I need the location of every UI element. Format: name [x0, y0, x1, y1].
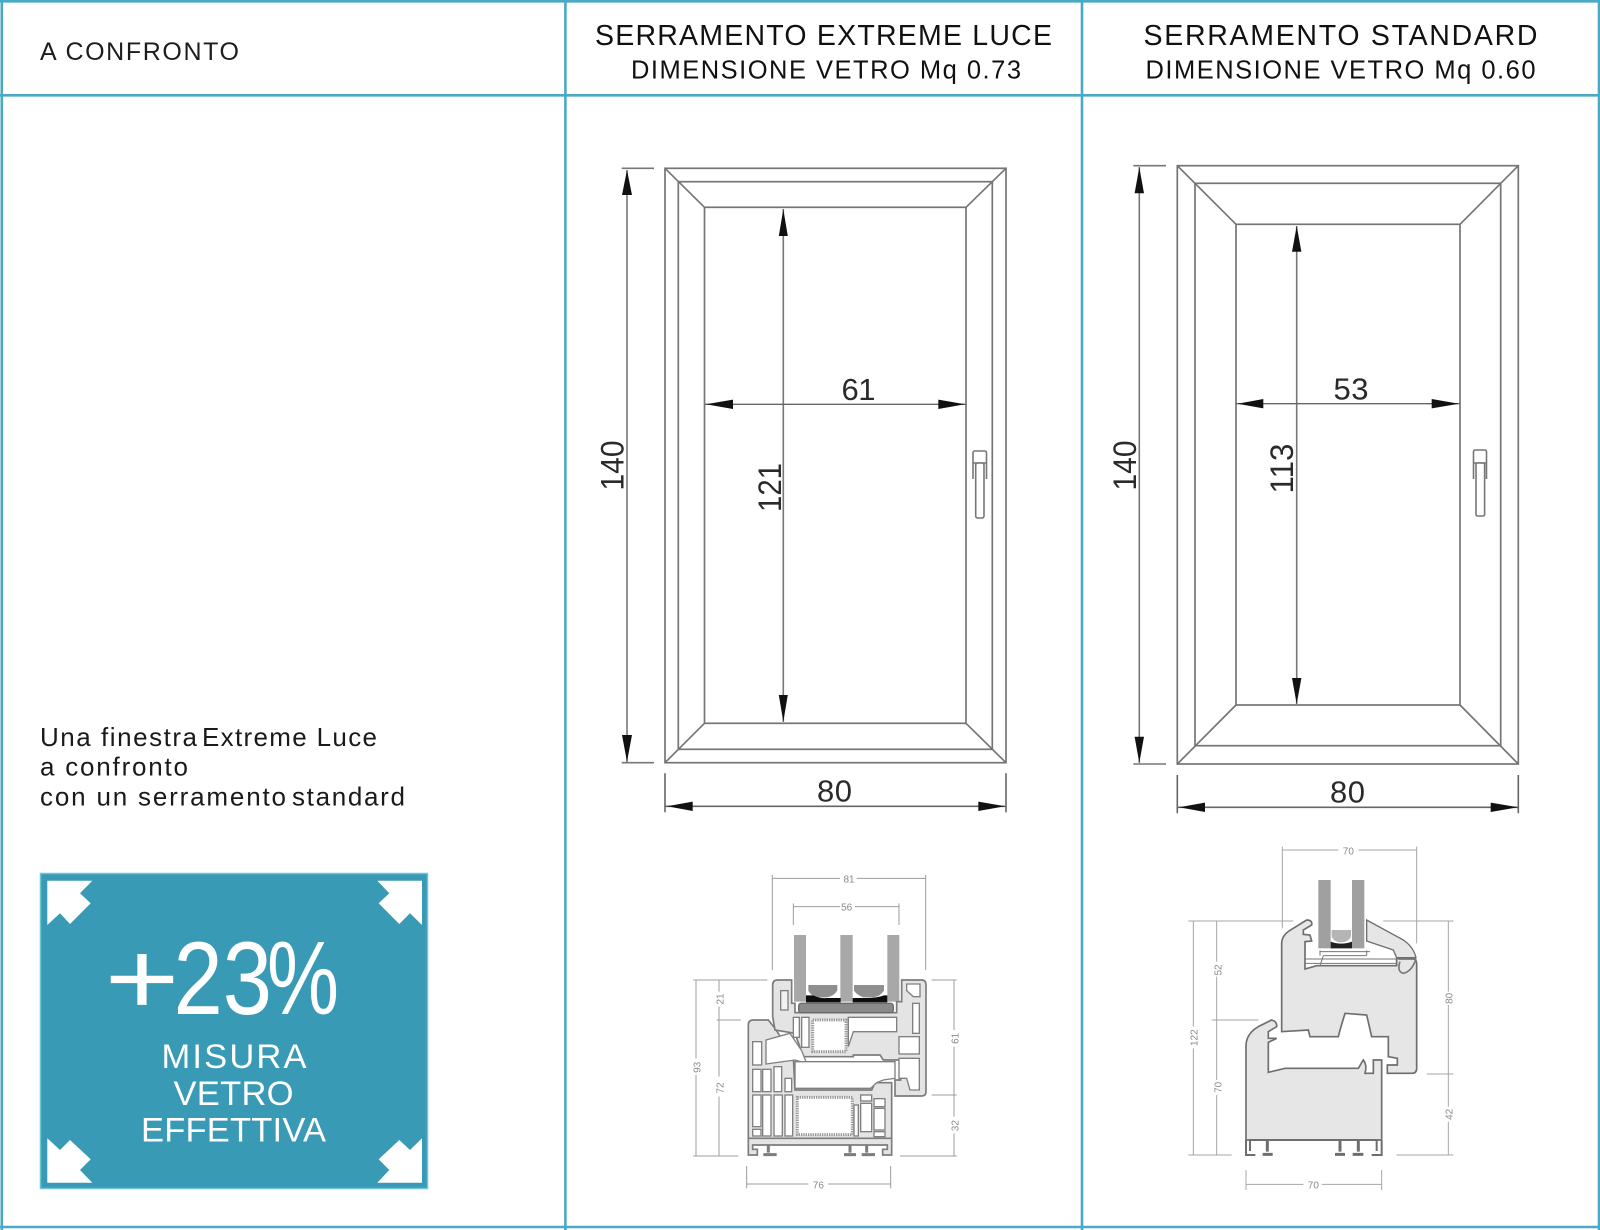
- dimension: height 140: 140: [1107, 440, 1143, 490]
- profile dimensions: 122: [1189, 1029, 1200, 1046]
- frame body: [1246, 1020, 1382, 1140]
- profile dimensions: 81: [843, 874, 855, 885]
- profile base and feet: [748, 1138, 892, 1155]
- callout caption: VETRO: [174, 1075, 294, 1113]
- cross section: standard profile: [1188, 846, 1456, 1191]
- big percentage: 23: [174, 921, 272, 1037]
- dimension: glass height 121: [752, 209, 788, 722]
- dimension: height 140: [594, 168, 654, 763]
- profile dimensions: 32: [951, 1120, 962, 1131]
- window drawing: standard: [1107, 166, 1518, 813]
- icon: window handle: [973, 451, 986, 518]
- dimension: width 80: 80: [817, 774, 852, 809]
- big percentage: [104, 921, 339, 1037]
- callout caption: MISURA: [162, 1038, 306, 1076]
- profile dimensions: 80: [1445, 992, 1456, 1004]
- intro text block: a confronto: [40, 752, 188, 782]
- window drawing: extreme luce: [594, 168, 1006, 812]
- profile dimensions: 42: [1445, 1108, 1456, 1120]
- column heading: serramento standard: [1144, 20, 1538, 84]
- profile dimensions: 21: [716, 993, 727, 1005]
- intro text block: con un serramento: [40, 782, 286, 812]
- window frame: [1177, 166, 1518, 764]
- intro text block: [40, 722, 405, 812]
- intro text block: standard: [292, 782, 405, 812]
- dimension: glass height 121: 121: [752, 463, 788, 512]
- dimension: width 80: [665, 773, 1006, 812]
- glass panes: [794, 935, 899, 1002]
- dimension: height 140: [1107, 166, 1166, 764]
- profile dimensions: 61: [951, 1032, 962, 1044]
- big percentage: +: [104, 921, 180, 1037]
- dimension: glass width 53: 53: [1334, 371, 1368, 406]
- column heading: serramento standard: DIMENSIONE VETRO Mq 0.60: [1146, 56, 1536, 84]
- profile dimensions: 70: [1308, 1180, 1319, 1191]
- dimension: height 140: 140: [594, 440, 630, 490]
- cross section: extreme luce profile: [693, 874, 962, 1191]
- icon: corner arrow bottom right: [377, 1138, 422, 1183]
- dimension: glass height 113: [1264, 226, 1301, 704]
- big percentage: %: [267, 921, 339, 1037]
- frame and sash body: [748, 980, 926, 1138]
- profile dimensions: 70: [1343, 846, 1354, 857]
- column heading: serramento extreme luce: [595, 20, 1052, 84]
- gasket details: [1305, 950, 1416, 973]
- profile dimensions: 72: [716, 1082, 727, 1094]
- profile dimensions: 52: [1213, 964, 1224, 976]
- dimension: glass width 61: [705, 372, 966, 409]
- dimension: width 80: [1177, 775, 1518, 813]
- column heading: serramento extreme luce: DIMENSIONE VETRO Mq 0.73: [631, 56, 1021, 84]
- dimension: width 80: 80: [1330, 775, 1365, 810]
- icon: corner arrow bottom left: [47, 1138, 92, 1183]
- profile dimensions: 76: [813, 1180, 824, 1191]
- profile dimensions: 93: [693, 1061, 704, 1073]
- dimension: glass height 113: 113: [1264, 444, 1300, 494]
- dimension: glass width 53: [1236, 371, 1460, 408]
- icon: corner arrow top left: [47, 881, 92, 925]
- icon: window handle: [1474, 450, 1486, 516]
- profile chambers: [753, 984, 920, 1137]
- heading: a confronto: A CONFRONTO: [40, 38, 239, 66]
- intro text block: Una finestra: [40, 722, 198, 752]
- sash body: [1282, 920, 1417, 1073]
- frame base and feet: [1246, 1140, 1382, 1155]
- column heading: serramento standard: SERRAMENTO STANDARD: [1144, 20, 1538, 52]
- profile dimensions: [1188, 846, 1456, 1191]
- glass panes: [1318, 880, 1364, 948]
- window frame: [665, 168, 1006, 763]
- profile dimensions: 56: [841, 903, 853, 914]
- glass spacers and seals: [799, 985, 893, 1013]
- callout caption: [141, 1038, 326, 1150]
- column heading: serramento extreme luce: SERRAMENTO EXTREME LUCE: [595, 20, 1052, 52]
- callout caption: EFFETTIVA: [141, 1112, 326, 1150]
- dimension: glass width 61: 61: [842, 372, 876, 407]
- intro text block: Extreme Luce: [202, 722, 377, 752]
- glazing bead: [1367, 920, 1416, 958]
- profile dimensions: 70: [1213, 1081, 1224, 1093]
- icon: corner arrow top right: [377, 881, 422, 925]
- callout: +23% misura vetro effettiva: [40, 874, 428, 1188]
- profile dimensions: [693, 874, 962, 1191]
